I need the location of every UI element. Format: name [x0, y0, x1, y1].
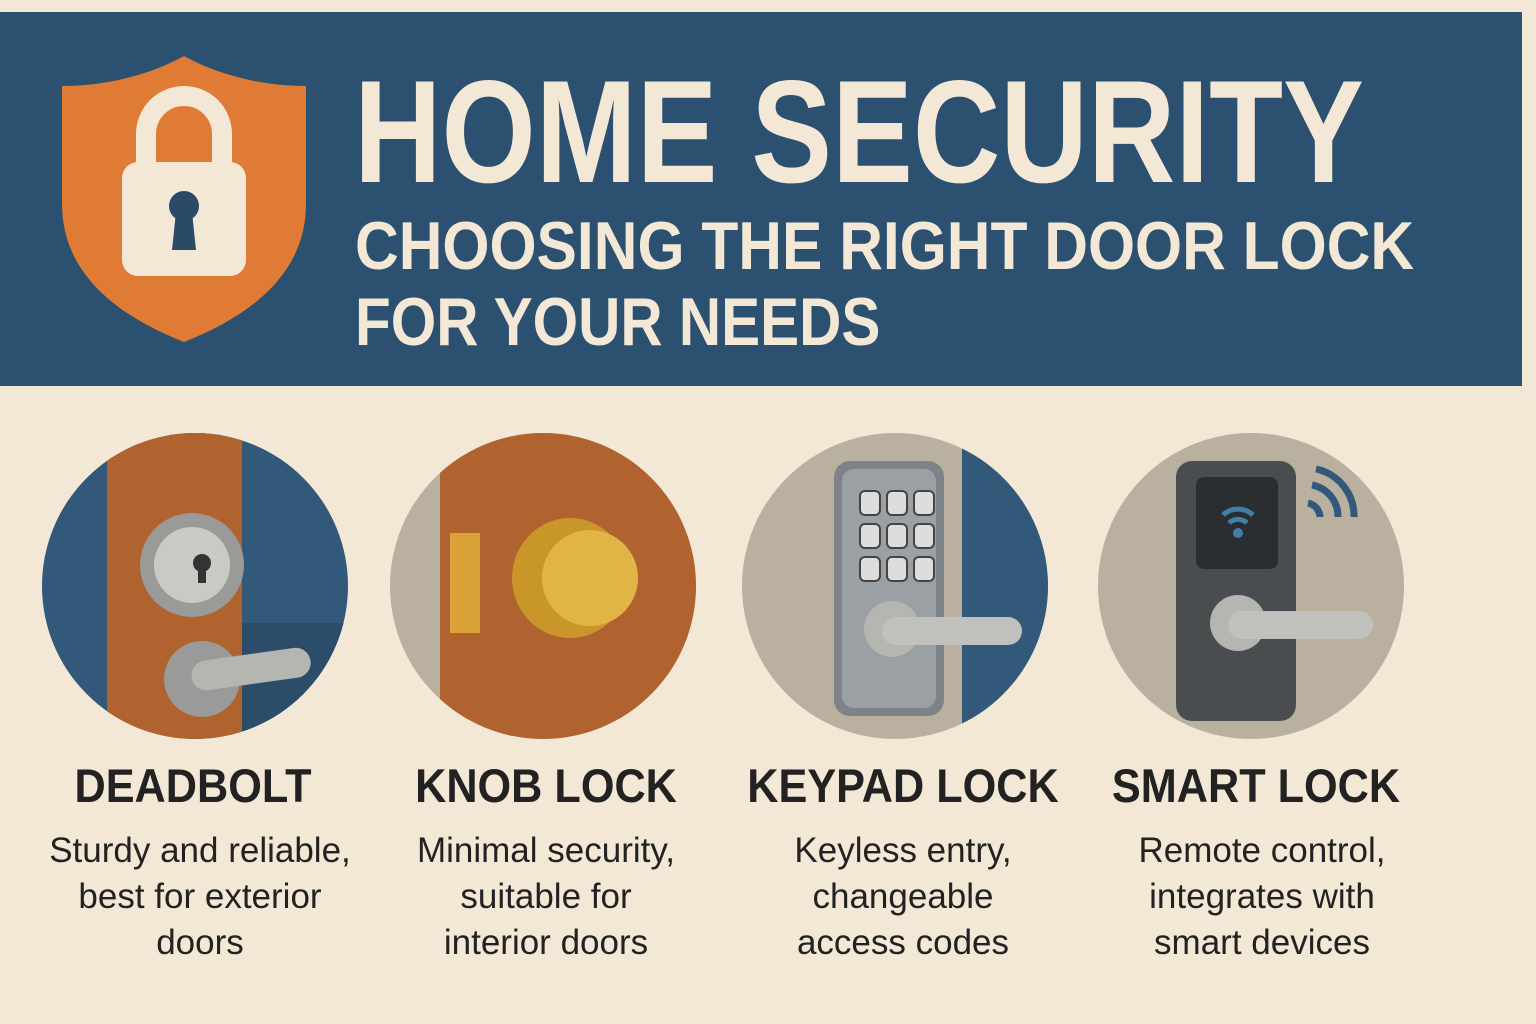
subtitle: CHOOSING THE RIGHT DOOR LOCK — [355, 208, 1414, 284]
icon: deadbolt — [42, 433, 348, 739]
label: keypad lock: KEYPAD LOCK — [747, 759, 1059, 812]
text: smart lock: integrates with — [1149, 877, 1375, 916]
text: knob lock — [417, 831, 675, 962]
text: smart lock — [1138, 831, 1386, 962]
text: knob lock: interior doors — [444, 923, 648, 962]
subtitle: FOR YOUR NEEDS — [355, 284, 880, 360]
icon: keypad lock — [742, 433, 1048, 739]
icon: knob lock — [390, 433, 696, 739]
subtitle — [355, 208, 1414, 360]
label: deadbolt: DEADBOLT — [74, 759, 311, 812]
text: knob lock: suitable for — [460, 877, 632, 916]
text: smart lock: smart devices — [1154, 923, 1370, 962]
text: deadbolt: Sturdy and reliable, — [49, 831, 351, 870]
text: keypad lock: Keyless entry, — [794, 831, 1012, 870]
icon: smart lock — [1098, 433, 1404, 739]
text: keypad lock — [794, 831, 1012, 962]
text: smart lock: Remote control, — [1138, 831, 1386, 870]
header band — [0, 12, 1522, 386]
title: HOME SECURITY — [354, 50, 1364, 213]
icon: shield with padlock — [62, 56, 306, 342]
text: deadbolt: best for exterior — [78, 877, 322, 916]
label: smart lock: SMART LOCK — [1112, 759, 1400, 812]
text: deadbolt — [49, 831, 351, 962]
text: knob lock: Minimal security, — [417, 831, 675, 870]
text: keypad lock: changeable — [812, 877, 994, 916]
text: deadbolt: doors — [156, 923, 244, 962]
text: keypad lock: access codes — [797, 923, 1009, 962]
label: knob lock: KNOB LOCK — [415, 759, 677, 812]
